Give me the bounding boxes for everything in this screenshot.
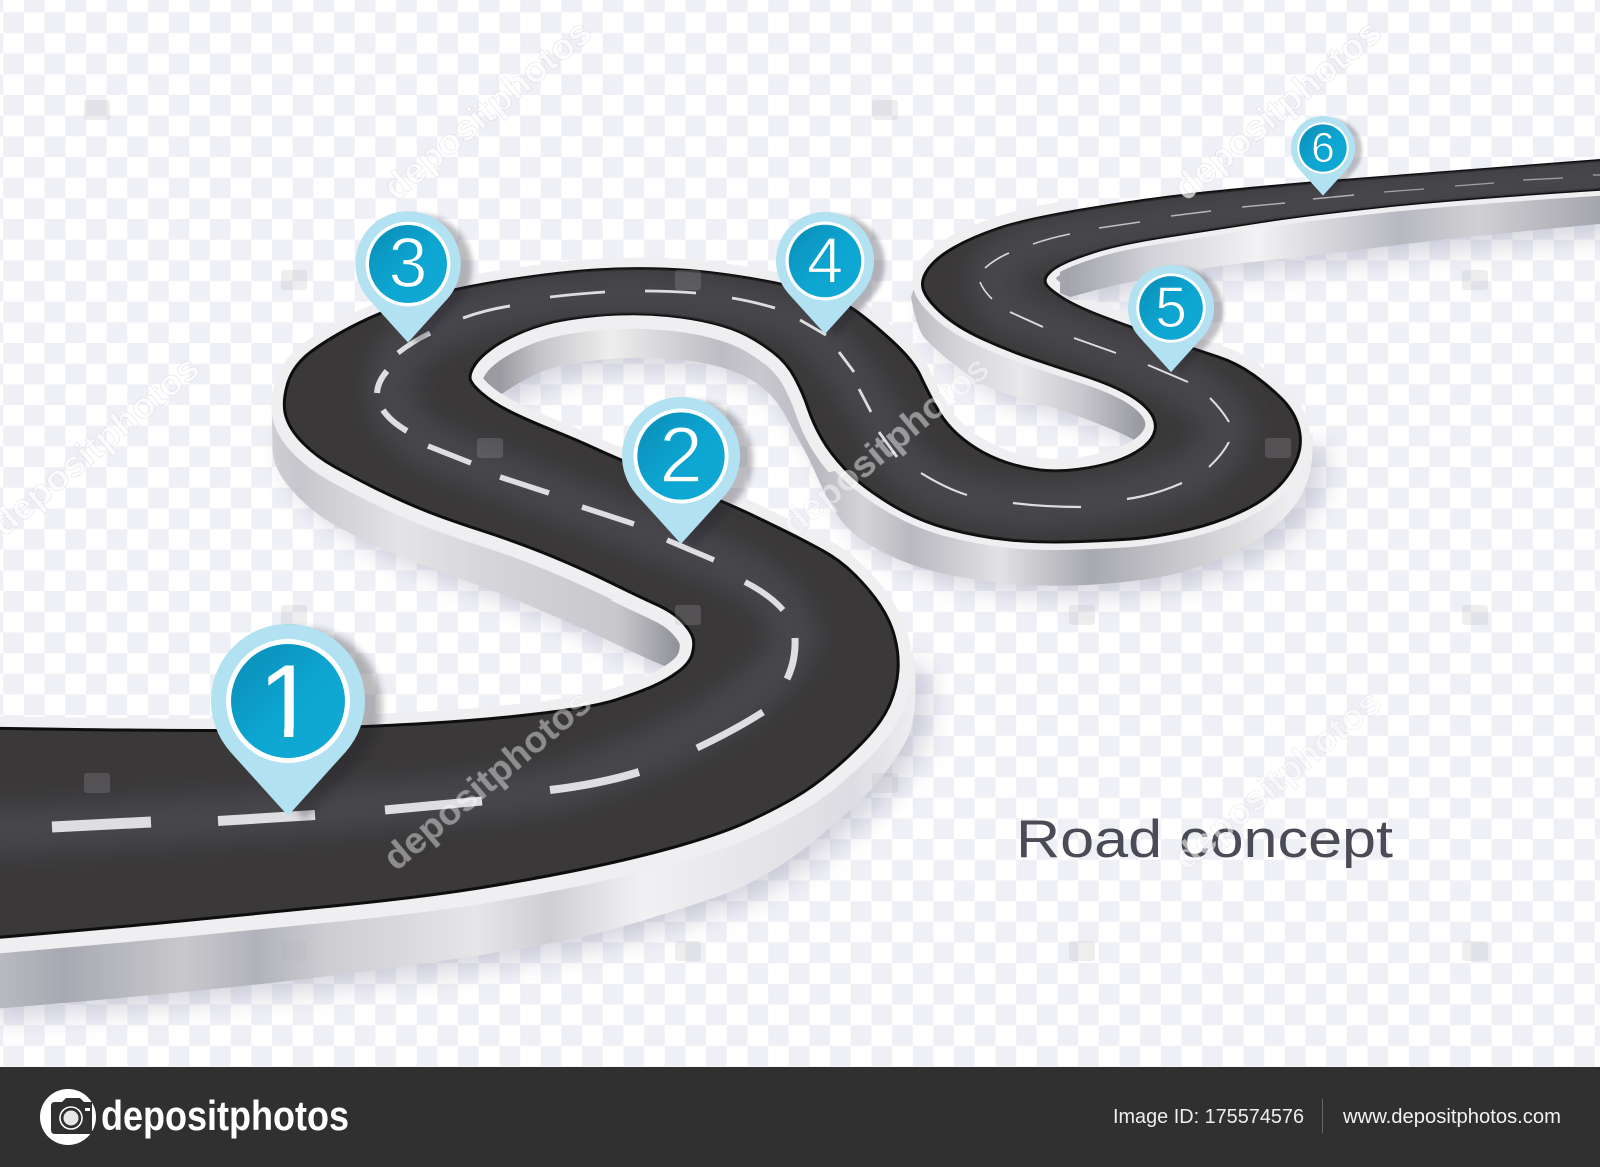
watermarks: depositphotos bbox=[773, 347, 997, 544]
watermark camera marks bbox=[84, 100, 1488, 961]
watermarks: depositphotos bbox=[375, 11, 599, 208]
website url: www.depositphotos.com bbox=[1342, 1106, 1561, 1128]
pin 4 bbox=[776, 212, 885, 337]
image id: Image ID: 175574576 bbox=[1113, 1106, 1304, 1128]
pin 3: 3 bbox=[389, 224, 427, 302]
watermarks: depositphotos bbox=[1165, 11, 1389, 208]
pin 3 bbox=[355, 211, 472, 346]
pin 6 bbox=[1291, 116, 1362, 198]
pin 4: 4 bbox=[807, 224, 843, 297]
road centre dashes bbox=[52, 175, 1600, 827]
icon: camera logo bbox=[40, 1089, 96, 1145]
logo wordmark: depositphotos bbox=[101, 1092, 349, 1139]
watermarks bbox=[0, 11, 1389, 878]
pin 1 bbox=[211, 624, 382, 820]
pin 2: 2 bbox=[659, 411, 703, 499]
road surface bbox=[0, 159, 1600, 939]
footer separator bbox=[1322, 1099, 1323, 1133]
watermarks: depositphotos bbox=[1165, 681, 1389, 878]
road soft shadow bbox=[0, 185, 1600, 1020]
footer bar bbox=[0, 1067, 1600, 1167]
road curb rim bbox=[0, 157, 1600, 942]
title: road concept: Road concept bbox=[1016, 810, 1393, 869]
pin 5: 5 bbox=[1155, 276, 1187, 340]
pin 5 bbox=[1128, 265, 1223, 375]
pin 1: 1 bbox=[258, 644, 316, 760]
watermarks: depositphotos bbox=[375, 681, 599, 878]
pin 6: 6 bbox=[1311, 124, 1335, 172]
pin 2 bbox=[622, 397, 753, 547]
road side walls bbox=[0, 175, 1600, 1010]
